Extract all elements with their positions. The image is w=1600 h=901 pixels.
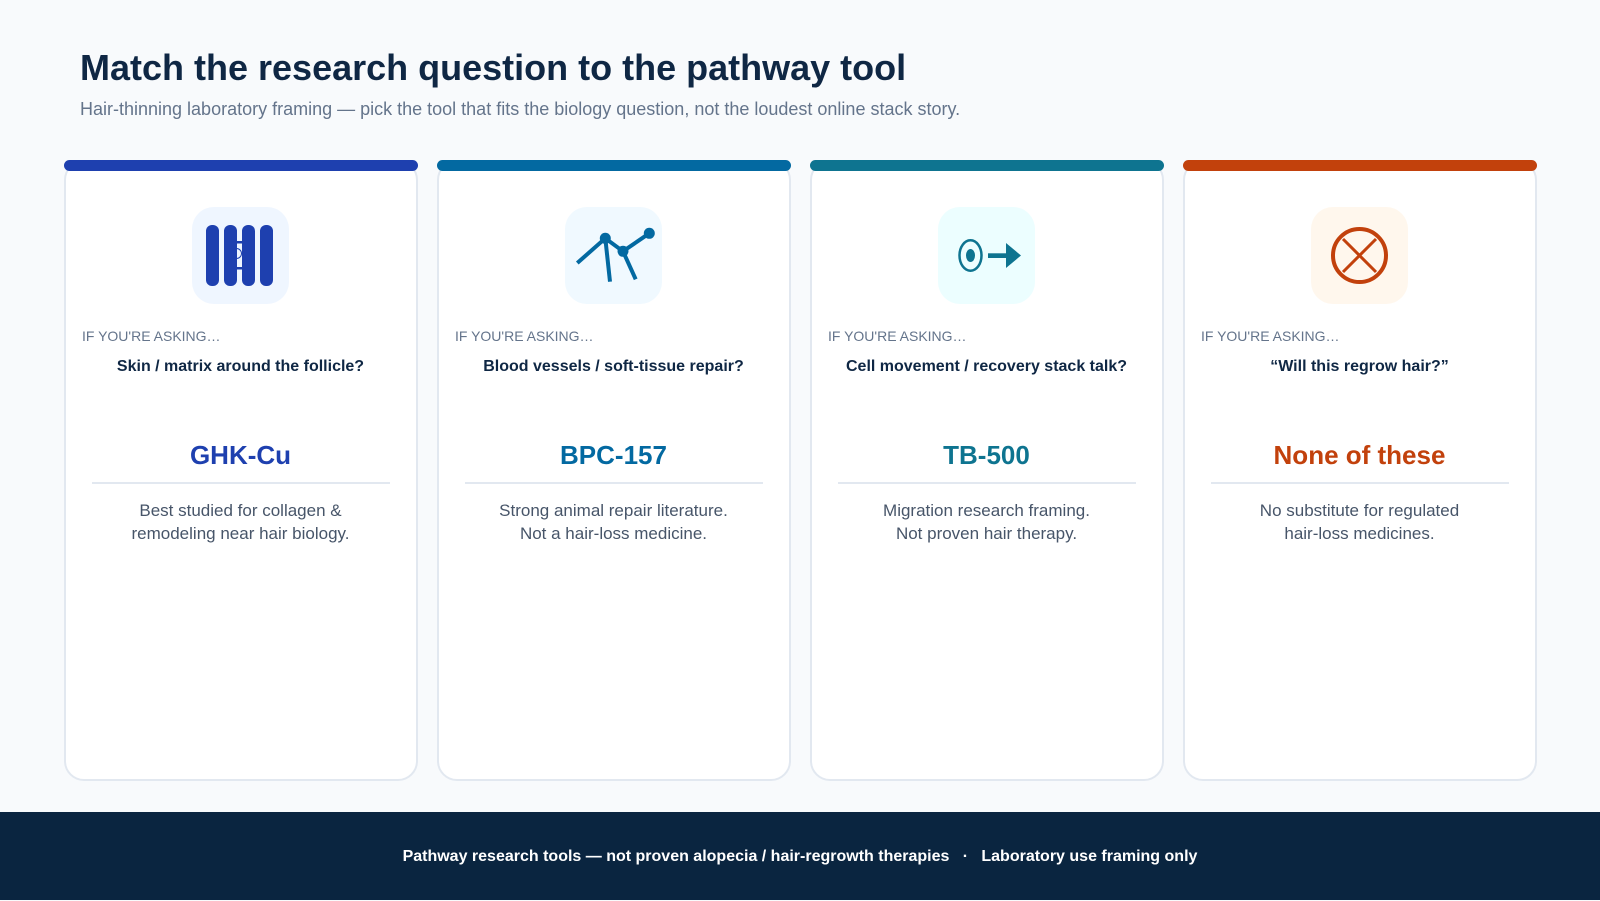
description xyxy=(883,501,1090,543)
label: if you're asking: IF YOU'RE ASKING… xyxy=(1201,328,1340,344)
description: remodeling near hair biology. xyxy=(132,524,349,543)
description: Best studied for collagen & xyxy=(139,501,342,520)
description: Not a hair-loss medicine. xyxy=(520,524,707,543)
accent bar: BPC-157 xyxy=(437,160,791,171)
description: hair-loss medicines. xyxy=(1284,524,1435,543)
question: “Will this regrow hair?” xyxy=(1270,358,1449,375)
description xyxy=(1260,501,1459,543)
icon: crossed circle xyxy=(1311,207,1408,304)
description xyxy=(499,501,728,543)
icon: vessel branches xyxy=(565,207,662,304)
accent bar: None of these xyxy=(1183,160,1537,171)
icon: cell migration xyxy=(938,207,1035,304)
tool name: GHK-Cu xyxy=(190,440,291,470)
accent bar: TB-500 xyxy=(810,160,1164,171)
description xyxy=(132,501,349,543)
panel: None of these xyxy=(1183,160,1537,781)
label: if you're asking: IF YOU'RE ASKING… xyxy=(828,328,967,344)
label: if you're asking: IF YOU'RE ASKING… xyxy=(455,328,594,344)
description: Migration research framing. xyxy=(883,501,1090,520)
description: No substitute for regulated xyxy=(1260,501,1459,520)
tool name: BPC-157 xyxy=(560,440,667,470)
subtitle: Hair-thinning laboratory framing — pick the tool that fits the biology question, not the loudest online stack story. xyxy=(80,99,960,119)
description: Not proven hair therapy. xyxy=(896,524,1077,543)
panel: TB-500 xyxy=(810,160,1164,781)
footer band xyxy=(0,812,1600,900)
accent bar: GHK-Cu xyxy=(64,160,418,171)
question: Skin / matrix around the follicle? xyxy=(117,358,364,375)
question: Blood vessels / soft-tissue repair? xyxy=(483,358,744,375)
icon: collagen matrix xyxy=(192,207,289,304)
label: if you're asking: IF YOU'RE ASKING… xyxy=(82,328,221,344)
panel: BPC-157 xyxy=(437,160,791,781)
panel: GHK-Cu xyxy=(64,160,418,781)
footer text: Pathway research tools — not proven alopecia / hair-regrowth therapies · Laboratory use framing only xyxy=(403,848,1197,865)
tool name: TB-500 xyxy=(943,440,1030,470)
tool name: None of these xyxy=(1274,440,1445,470)
question: Cell movement / recovery stack talk? xyxy=(846,358,1127,375)
description: Strong animal repair literature. xyxy=(499,501,728,520)
title: Match the research question to the pathway tool xyxy=(80,47,906,88)
